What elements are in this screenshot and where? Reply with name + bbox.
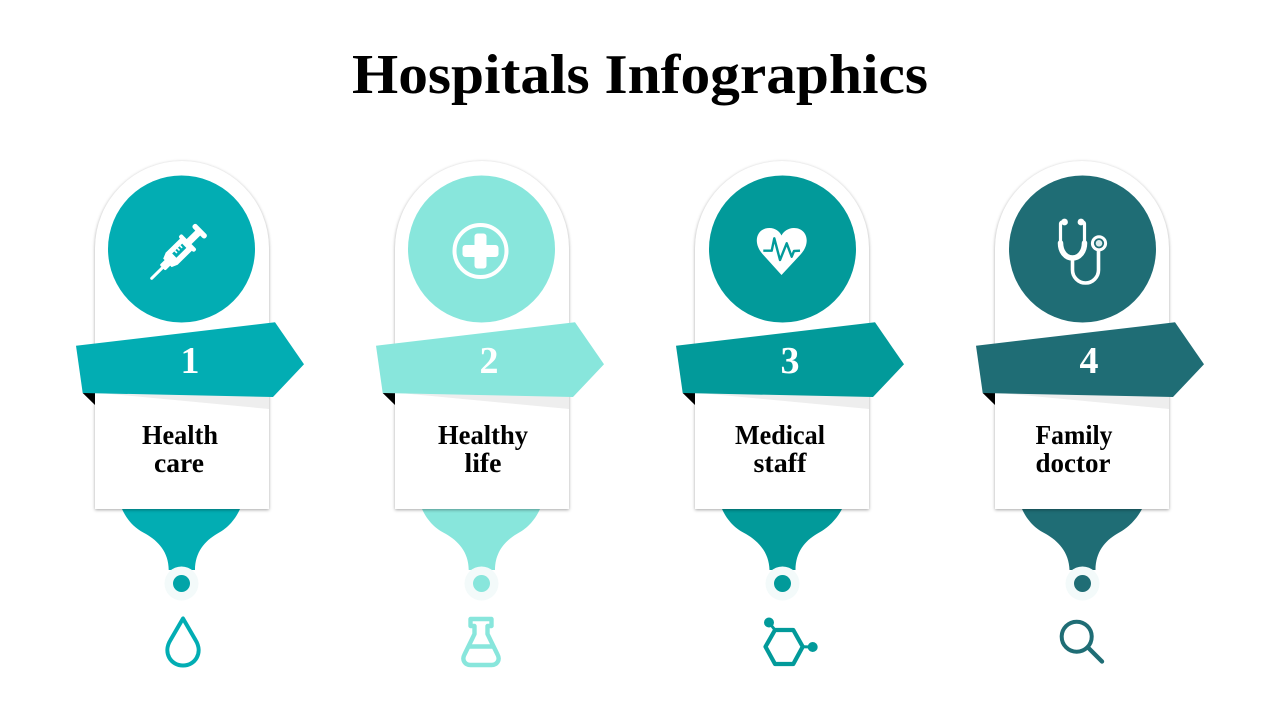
ribbon shadow 3 bbox=[700, 393, 869, 409]
icon: water drop bbox=[167, 618, 199, 666]
connector dot 2 bbox=[464, 566, 498, 600]
label 1: care bbox=[154, 448, 204, 478]
label 1: Health bbox=[142, 420, 218, 450]
ribbon 1 bbox=[76, 322, 304, 397]
icon circle 4 bbox=[1009, 176, 1156, 322]
number 3: 3 bbox=[780, 340, 800, 382]
label 4: doctor bbox=[1036, 448, 1111, 478]
title: Hospitals Infographics bbox=[352, 44, 928, 106]
panel: medical staff bbox=[676, 161, 904, 664]
icon: flask bbox=[463, 619, 499, 665]
icon: magnifier bbox=[1062, 622, 1102, 662]
icon circle 1 bbox=[108, 176, 255, 322]
ribbon shadow 2 bbox=[400, 393, 569, 409]
number 4: 4 bbox=[1080, 340, 1098, 382]
ribbon fold 2 bbox=[383, 393, 395, 405]
icon: stethoscope bbox=[1060, 219, 1106, 283]
panel: family doctor bbox=[976, 161, 1204, 662]
card body 4 bbox=[995, 161, 1169, 509]
ribbon fold 4 bbox=[983, 393, 995, 405]
connector dot 1 bbox=[164, 566, 198, 600]
number 2: 2 bbox=[480, 340, 498, 382]
label 3 bbox=[735, 420, 825, 478]
label 2: Healthy bbox=[438, 420, 528, 450]
card body 1 bbox=[95, 161, 269, 509]
panel: healthy life bbox=[376, 161, 604, 665]
connector dot 4 bbox=[1066, 566, 1100, 600]
label 3: Medical bbox=[735, 420, 825, 450]
ribbon 3 bbox=[676, 322, 904, 397]
funnel connector 4 bbox=[1022, 509, 1142, 570]
label 4 bbox=[1036, 420, 1113, 478]
ribbon shadow 1 bbox=[100, 393, 269, 409]
ribbon fold 1 bbox=[83, 393, 95, 405]
funnel connector 1 bbox=[122, 509, 240, 570]
number 1: 1 bbox=[180, 340, 200, 382]
funnel connector 3 bbox=[722, 509, 842, 570]
connector dot 3 bbox=[766, 566, 800, 600]
icon circle 2 bbox=[408, 176, 555, 322]
icon circle 3 bbox=[709, 176, 856, 322]
ribbon 2 bbox=[376, 322, 604, 397]
label 3: staff bbox=[754, 448, 808, 478]
panel: health care bbox=[76, 161, 304, 666]
label 2 bbox=[438, 420, 528, 478]
card body 3 bbox=[695, 161, 869, 509]
icon: molecule bbox=[764, 618, 818, 664]
label 4: Family bbox=[1036, 420, 1113, 450]
card body 2 bbox=[395, 161, 569, 509]
icon: medical cross bbox=[454, 225, 506, 277]
ribbon fold 3 bbox=[683, 393, 695, 405]
funnel connector 2 bbox=[422, 509, 540, 570]
ribbon 4 bbox=[976, 322, 1204, 397]
icon: heart with pulse bbox=[757, 228, 807, 275]
ribbon shadow 4 bbox=[1000, 393, 1169, 409]
icon: syringe bbox=[144, 221, 209, 286]
label 1 bbox=[142, 420, 218, 478]
label 2: life bbox=[464, 448, 502, 478]
